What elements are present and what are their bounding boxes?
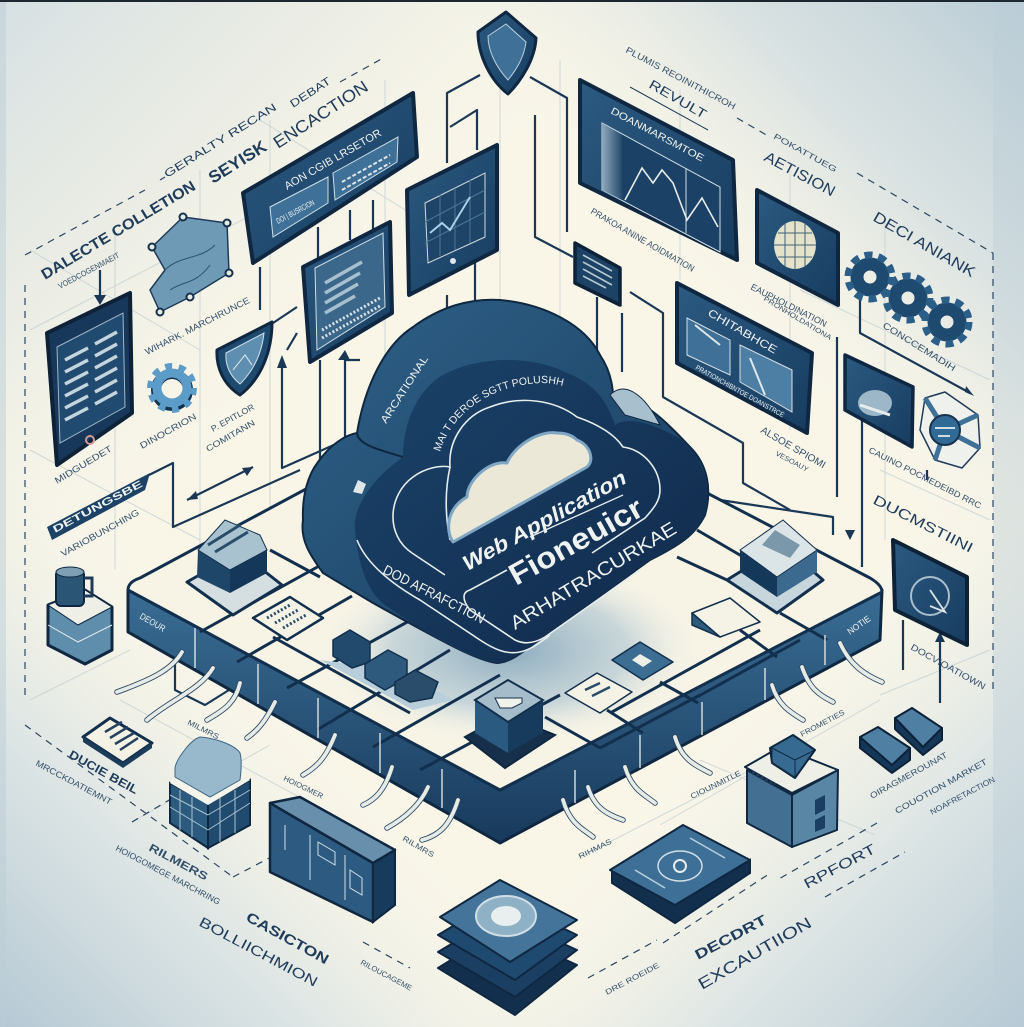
labels: top left: P. EPITLOR <box>209 402 256 434</box>
device: server box <box>270 797 395 922</box>
panel: database: CHITABHCE <box>706 307 779 357</box>
cloud text path <box>440 383 590 452</box>
panel: dashboard <box>580 80 737 260</box>
labels: bottom: OIRAGMEROUNAT <box>868 750 949 801</box>
icon: cube flower <box>920 392 980 468</box>
labels: bottom: MRCCKDATIEMNT <box>34 758 114 807</box>
ribbon label: DETUNGSBE <box>51 479 145 536</box>
labels: bottom: RILMERS <box>147 842 210 883</box>
panel: text tablet <box>303 222 392 362</box>
device: small server cube <box>745 735 838 847</box>
labels: bottom: BOLLIICHMION <box>197 914 321 990</box>
labels: top right: AETISION <box>761 149 838 200</box>
cables under platform <box>117 643 882 840</box>
labels: bottom: DUCIE BEIL <box>67 747 141 797</box>
panel: database: PRATIONCHIBNTOE DOANSTRCE <box>694 365 785 419</box>
labels: top right: EAUPHOLDINATION <box>749 282 828 329</box>
labels: bottom: HOIOGMER <box>282 774 325 801</box>
cloud title <box>353 354 680 634</box>
labels: top right: ALSOE SPIOMI <box>758 425 827 471</box>
connector lines upper <box>100 75 970 705</box>
labels: bottom: RIHMAS <box>577 837 613 861</box>
labels: top left: GERALTY RECAN <box>162 101 279 181</box>
panel: gauge <box>893 540 967 645</box>
device: tablet box <box>610 825 750 923</box>
cloud inner outline <box>357 400 660 653</box>
labels: top right: REVULT <box>646 77 709 122</box>
labels: top right: PLUMIS REOINITHICROH <box>624 45 737 112</box>
panel: cloud tile <box>845 355 913 447</box>
icon: top shield <box>478 12 536 94</box>
labels: top right: VESOAUY <box>774 451 809 474</box>
arrowheads <box>94 295 974 642</box>
labels: top right: CAUINO POCMEDEIBD RRC <box>867 445 983 511</box>
labels: top right: CONCCEMADIH <box>881 320 957 373</box>
icon: middle shield <box>217 322 272 395</box>
cloud title: DOD AFRAFCTION <box>381 561 488 627</box>
labels: top right: DUCMSTIINI <box>871 491 976 556</box>
labels: top left: COMITANN <box>204 418 257 454</box>
panel: small text <box>575 243 620 305</box>
labels: bottom: HOIOGOMEGE MARCHRING <box>114 843 222 907</box>
platform side labels: NOTIE <box>845 614 872 637</box>
labels: top left: VARIOBUNCHING <box>59 507 141 559</box>
labels: top right: PRAKOA ANINE AOIDMATION <box>589 206 696 274</box>
icon: blue gear <box>150 366 194 410</box>
panel: aon cigib: DOI | BUSRCION <box>275 198 316 226</box>
panel: left tablet <box>47 293 132 465</box>
icon: glass cube <box>170 737 250 848</box>
panel: database <box>677 283 812 433</box>
cloud title: ARCATIONAL <box>378 354 431 426</box>
labels: bottom: RILMRS <box>401 834 436 859</box>
platform <box>128 385 882 843</box>
labels: top right <box>589 45 987 691</box>
labels: bottom: DECDRT <box>692 911 770 963</box>
labels: top left: SEYISK <box>205 136 271 187</box>
platform side labels: DEOUR <box>138 611 168 634</box>
platform cards and small blocks <box>253 597 760 713</box>
device: stacked chip <box>438 880 577 1015</box>
labels: bottom: RPFORT <box>801 840 879 892</box>
panel: aon cigib: AON CGIB LRSETOR <box>282 127 384 193</box>
labels: top right: DOCVIOATIOWN <box>909 642 987 691</box>
labels: top right: POKATTUEG <box>772 132 838 174</box>
labels: top right: PRONHOLDATIONA <box>762 296 833 342</box>
cloud <box>302 298 710 664</box>
icon: network <box>148 214 232 316</box>
labels: top left: ENCACTION <box>270 77 372 152</box>
labels: bottom: RILOUCAGEME <box>359 958 414 993</box>
labels: top left <box>38 75 372 559</box>
cloud emblem <box>449 433 591 542</box>
labels: top left: WIHARK. MARCHRUNCE <box>143 295 251 357</box>
cloud title: MAI T DEROE SGTT POLUSHH <box>433 376 564 452</box>
panel: chart tablet <box>407 145 497 295</box>
labels: bottom: EXCAUTIION <box>696 915 815 993</box>
labels: bottom: DRE ROEIDE <box>604 961 661 997</box>
labels: bottom <box>34 708 997 997</box>
cloud title: Web Application <box>461 464 628 577</box>
labels: top left: DEBAT <box>288 75 334 111</box>
cloud title: ARHATRACURKAE <box>507 518 680 634</box>
cloud title: Fioneuicr <box>503 491 649 592</box>
chip center on platform <box>465 680 555 768</box>
labels: bottom: MILMRS <box>186 718 220 741</box>
labels: top left: MIDGUEDET <box>53 443 114 486</box>
device: two modules <box>860 708 942 773</box>
labels: top left: DALECTE COLLETION <box>38 178 199 283</box>
labels: bottom: FROMETIES <box>799 708 846 739</box>
labels: bottom: NOAFRETACTION <box>929 775 997 817</box>
card left lower <box>83 718 152 768</box>
panel: dashboard: DOANMARSMTOE <box>609 106 706 165</box>
labels: bottom: CIOUNMITLE <box>689 769 742 801</box>
platform side labels <box>138 611 872 637</box>
labels: bottom: COUOTION MARKET <box>893 757 989 816</box>
labels: top left: VOEDCOGENMAEIT <box>57 251 121 291</box>
ribbon label <box>47 473 150 540</box>
icon: right gears <box>848 255 969 344</box>
labels: bottom: CASICTON <box>244 909 332 967</box>
icon: left cup device <box>48 567 112 664</box>
chip right on platform <box>727 520 823 613</box>
panel: globe <box>757 190 838 305</box>
labels: top right: DECI ANIANK <box>870 209 978 281</box>
chip left on platform <box>187 520 282 615</box>
labels: top left: DINOCRION <box>138 411 198 451</box>
panel: aon cigib <box>243 93 417 263</box>
